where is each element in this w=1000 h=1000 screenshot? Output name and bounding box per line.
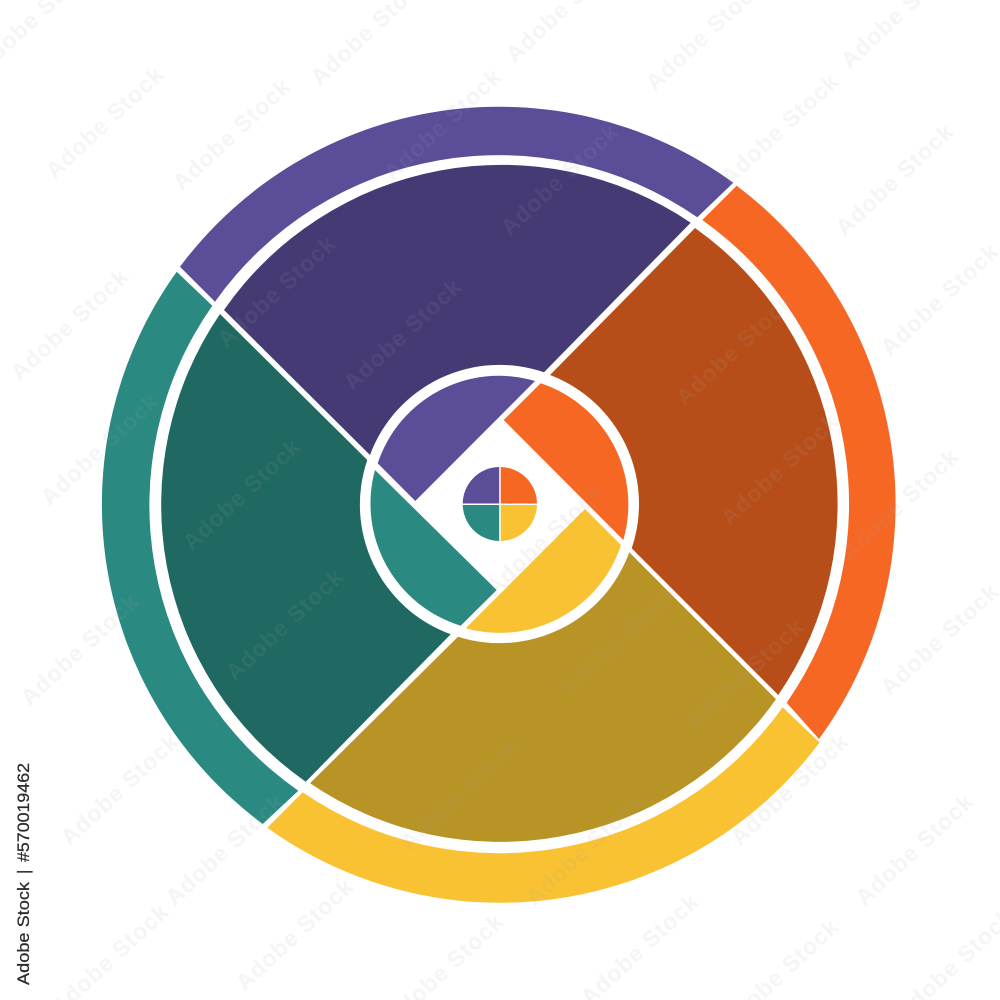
- watermark pattern: Adobe Stock: [830, 118, 959, 240]
- segment: outer orange: [702, 186, 896, 739]
- sector: inner purple: [378, 376, 535, 501]
- sector: olive: [310, 552, 776, 842]
- sector: inner yellow: [466, 509, 621, 633]
- watermark pattern: Adobe Stock: [480, 478, 609, 600]
- sector: dark purple: [224, 165, 691, 455]
- watermark pattern: Adobe Stock: [850, 788, 979, 910]
- segment: outer yellow: [267, 707, 820, 903]
- stock id caption: [14, 763, 33, 985]
- watermark pattern: Adobe Stock: [715, 68, 844, 190]
- sector: dark teal: [161, 314, 451, 782]
- watermark pattern: Adobe Stock: [555, 578, 684, 700]
- segment: outer purple: [180, 107, 733, 302]
- watermark pattern: Adobe Stock: [177, 433, 306, 555]
- watermark pattern: Adobe Stock: [160, 788, 289, 910]
- watermark pattern: Adobe Stock: [15, 588, 144, 710]
- watermark pattern: Adobe Stock: [670, 288, 799, 410]
- watermark pattern: Adobe Stock: [680, 613, 809, 735]
- watermark pattern: Adobe Stock: [715, 408, 844, 530]
- watermark pattern: Adobe Stock: [40, 61, 169, 183]
- watermark pattern: Adobe Stock: [875, 238, 1000, 360]
- watermark pattern: Adobe Stock: [5, 263, 134, 385]
- stock id caption: Adobe Stock: [14, 881, 33, 985]
- stock id caption: |: [14, 870, 33, 874]
- middle ring sectors: [161, 165, 838, 842]
- quadrant: purple: [463, 467, 499, 504]
- sector: inner teal: [370, 470, 497, 626]
- watermark pattern: Adobe Stock: [378, 63, 507, 185]
- watermark pattern: Adobe Stock: [395, 733, 524, 855]
- watermark pattern: Adobe Stock: [55, 728, 184, 850]
- watermark pattern: Adobe Stock: [212, 230, 341, 352]
- watermark pattern: Adobe Stock: [875, 578, 1000, 700]
- quadrant: teal: [463, 505, 499, 541]
- watermark pattern: Adobe Stock: [725, 728, 854, 850]
- watermark pattern: Adobe Stock: [495, 118, 624, 240]
- watermark pattern: Adobe Stock: [167, 73, 296, 195]
- watermark pattern: Adobe Stock: [220, 563, 349, 685]
- inner ring sectors: [370, 376, 628, 633]
- watermark pattern: Adobe Stock: [520, 788, 649, 910]
- watermark pattern: Adobe Stock: [338, 273, 467, 395]
- quadrant: orange: [501, 467, 537, 504]
- outer ring segments: [102, 107, 896, 903]
- sector: inner orange: [504, 383, 628, 540]
- sector: dark orange: [550, 228, 838, 695]
- watermark pattern: Adobe Stock: [835, 443, 964, 565]
- watermark pattern: Adobe Stock: [230, 873, 359, 995]
- stock id caption: #570019462: [14, 763, 33, 862]
- center circle quadrants: [463, 467, 537, 541]
- watermark pattern: Adobe Stock: [35, 388, 164, 510]
- quadrant: yellow: [501, 505, 537, 541]
- segment: outer teal: [102, 272, 298, 824]
